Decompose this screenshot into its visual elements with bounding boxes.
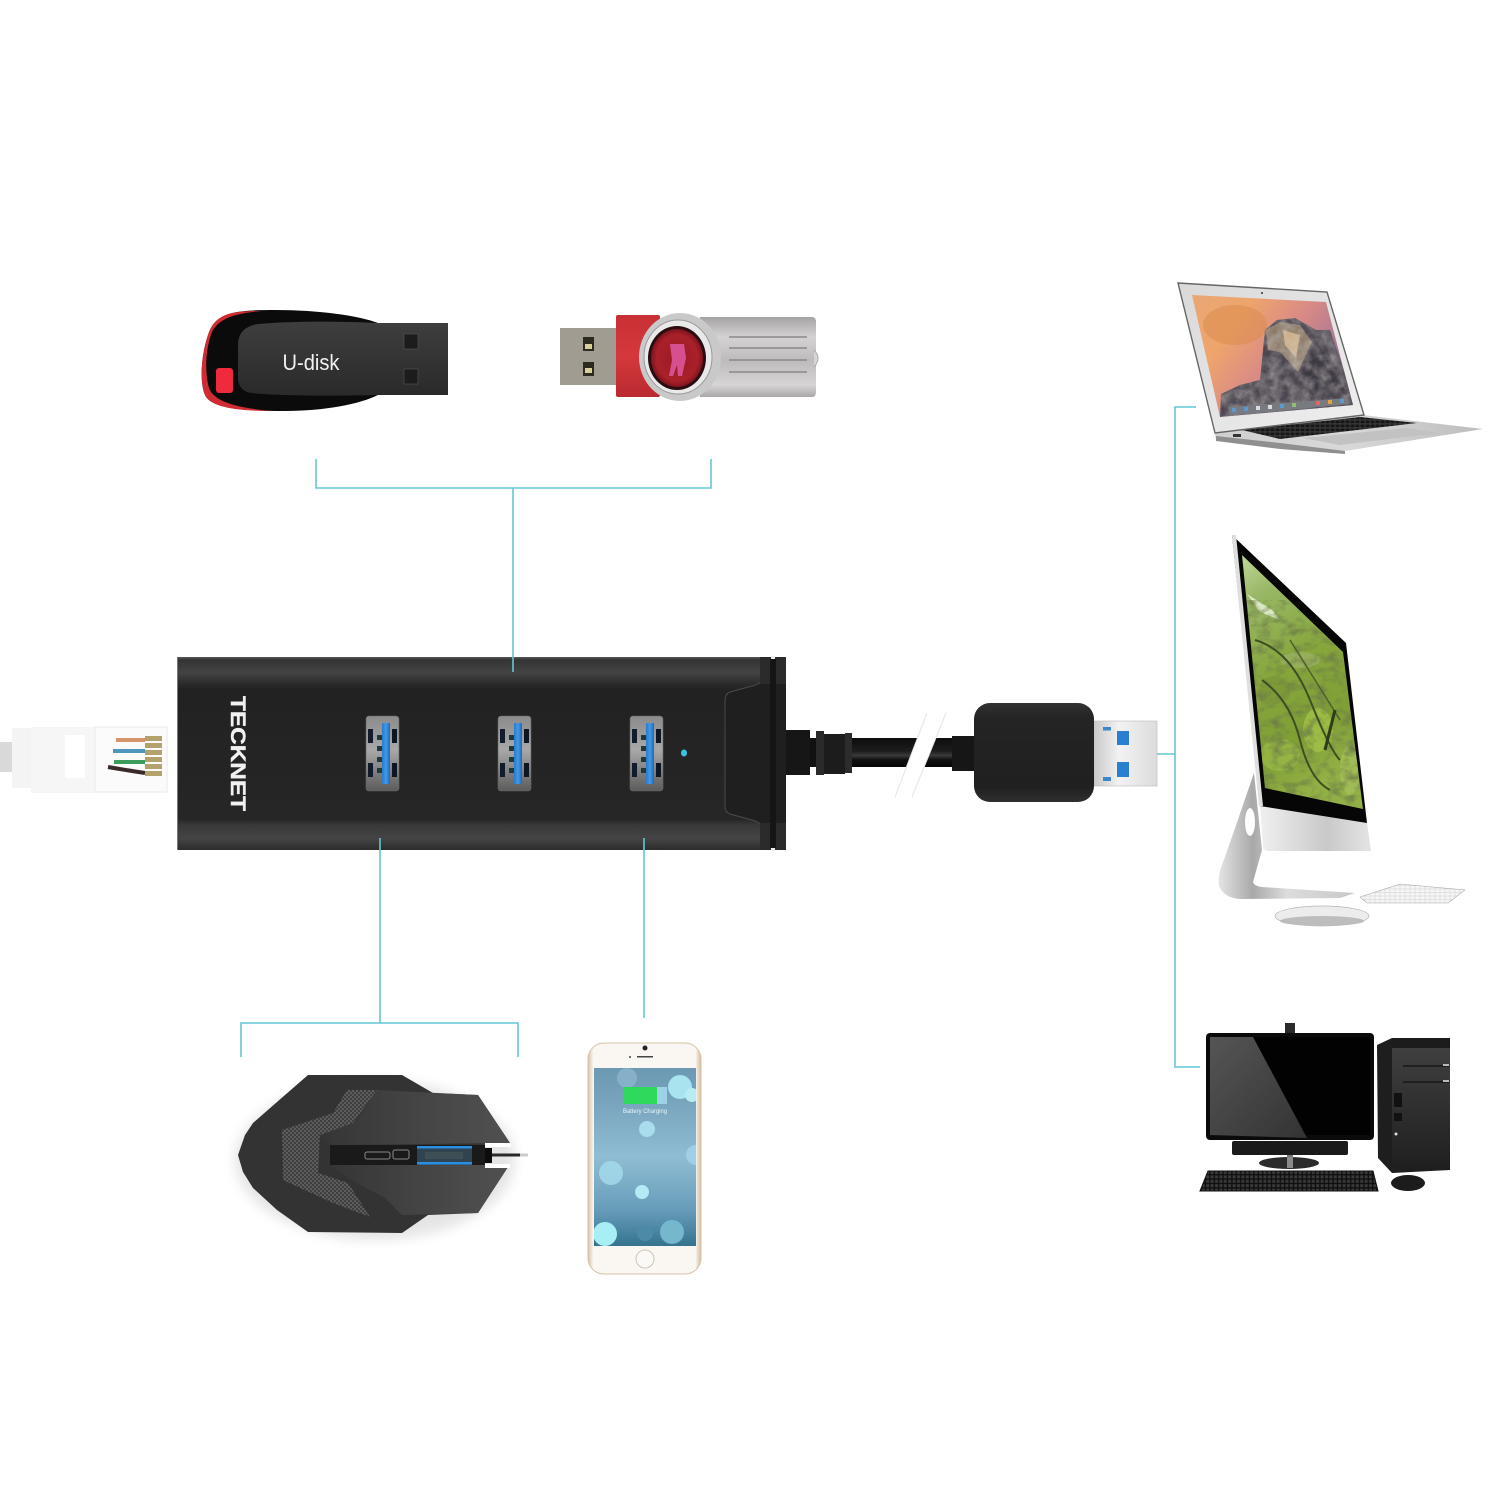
wires (108, 740, 145, 773)
chin (1260, 806, 1371, 851)
magic mouse (1275, 906, 1369, 926)
icon: RJ45 ethernet connector (0, 727, 167, 793)
cable break mark (895, 713, 946, 797)
USB port 1 (366, 716, 399, 791)
end cap (725, 657, 786, 850)
connector line: phone to hub (643, 838, 645, 1018)
icon: laptop (1178, 283, 1483, 454)
hub body (177, 656, 786, 851)
connector lines: mouse to hub (241, 838, 518, 1057)
logo: TECKNET: TECKNET (226, 696, 249, 811)
strain relief (785, 730, 852, 775)
LED indicator (681, 750, 687, 756)
speaker bar (1232, 1141, 1348, 1155)
tower (1377, 1038, 1392, 1173)
icon: gaming mouse (235, 1075, 528, 1240)
display (1232, 535, 1367, 823)
dock icons (1232, 399, 1344, 412)
PC mouse (1391, 1175, 1425, 1191)
scroll window (417, 1146, 472, 1165)
icon: black U-disk flash drive (202, 310, 448, 411)
battery icon (623, 1087, 657, 1104)
bokeh lights (593, 1068, 706, 1246)
label: U-disk: U-disk (282, 350, 340, 375)
label: Battery Charging: Battery Charging (623, 1109, 667, 1115)
icon: all-in-one desktop computer (1219, 535, 1465, 926)
infographic: USB hub connection diagram (0, 282, 1482, 1274)
webcam (1285, 1023, 1295, 1034)
USB 3.0 plug (952, 703, 1157, 802)
USB cable with break (785, 713, 952, 797)
connector lines: USB plug to computers (1157, 407, 1200, 1067)
icon: desktop PC with monitor and tower (1200, 1023, 1450, 1191)
USB port 3 (630, 716, 663, 791)
icon: smartphone charging (588, 1043, 706, 1274)
mouse cable (485, 1154, 520, 1156)
magic keyboard (1360, 884, 1465, 903)
icon: silver and red rotating flash drive (560, 313, 818, 401)
USB port 2 (498, 716, 531, 791)
connector lines: USB drives to hub (316, 459, 711, 672)
keyboard (1200, 1171, 1378, 1191)
mesh grip (282, 1090, 377, 1217)
stand (1219, 773, 1355, 899)
